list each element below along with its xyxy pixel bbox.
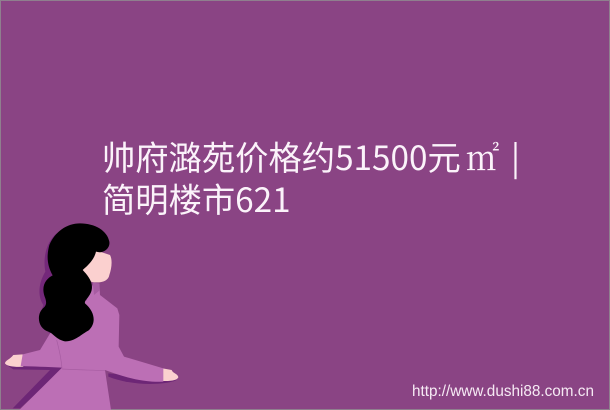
illustration: woman with long black hair in purple dress <box>5 223 178 410</box>
title: | <box>511 131 520 180</box>
title <box>102 131 520 222</box>
dress <box>19 283 163 410</box>
arm and skirt shadows <box>5 364 177 408</box>
title: 帅府潞苑价格约51500元 <box>102 131 461 180</box>
face <box>83 250 112 282</box>
left hand <box>5 354 23 367</box>
neck shadow <box>93 283 99 295</box>
hair <box>39 223 109 341</box>
title: ㎡ <box>466 132 499 180</box>
dress seams <box>57 340 105 371</box>
right hand <box>163 368 178 381</box>
watermark url: http://www.dushi88.com.cn <box>412 383 594 400</box>
hair shadow <box>39 233 77 350</box>
title: 简明楼市621 <box>102 173 291 222</box>
